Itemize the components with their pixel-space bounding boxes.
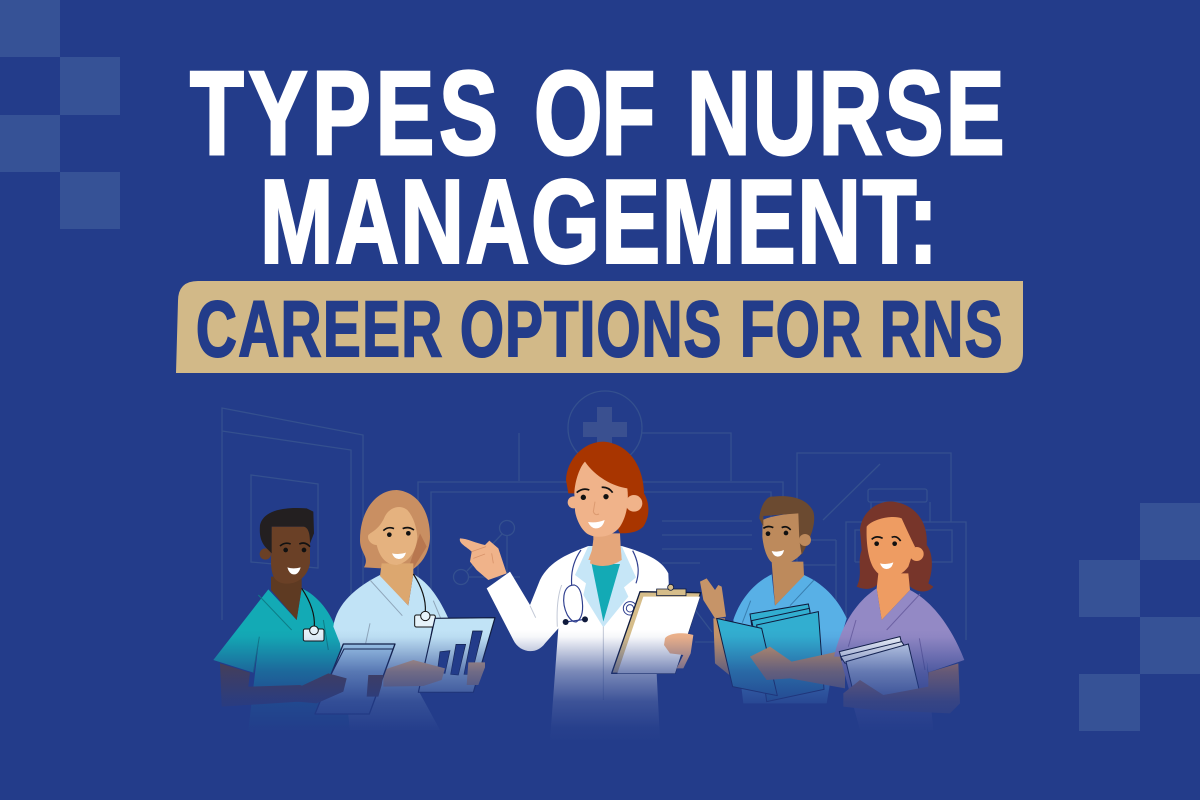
subtitle text: RNS bbox=[880, 286, 1002, 373]
doctor: white coat with clipboard bbox=[460, 442, 701, 740]
subtitle banner bbox=[176, 281, 1023, 373]
subtitle text bbox=[196, 286, 1002, 373]
title line 2: MANAGEMENT: bbox=[260, 156, 938, 289]
nurse 4: blue scrubs with folders bbox=[700, 496, 847, 703]
fade overlay at bottom of illustration bbox=[180, 630, 1000, 745]
nurse 1: teal scrubs bbox=[213, 508, 367, 730]
doctor pointing hand bbox=[460, 538, 507, 580]
subtitle text: FOR bbox=[740, 286, 862, 373]
group of nurses bbox=[213, 442, 964, 740]
title line 1 bbox=[190, 47, 1004, 180]
nurse 5: purple scrubs with books bbox=[834, 501, 964, 730]
title line 1: TYPES bbox=[190, 47, 498, 180]
doctor head bbox=[566, 442, 648, 560]
decorative squares: top left bbox=[0, 0, 120, 229]
doctor body bbox=[487, 540, 701, 740]
background line art: hospital bbox=[222, 391, 966, 642]
title line 1: OF bbox=[534, 47, 655, 180]
subtitle text: OPTIONS bbox=[460, 286, 721, 373]
title line 1: NURSE bbox=[687, 47, 1004, 180]
nurse 2: light blue scrubs with chart bbox=[333, 490, 495, 730]
decorative squares: right bbox=[1079, 503, 1200, 731]
subtitle text: CAREER bbox=[196, 286, 442, 373]
nurse 1 tablet and hands bbox=[297, 644, 395, 714]
cross emblem bbox=[583, 407, 627, 452]
